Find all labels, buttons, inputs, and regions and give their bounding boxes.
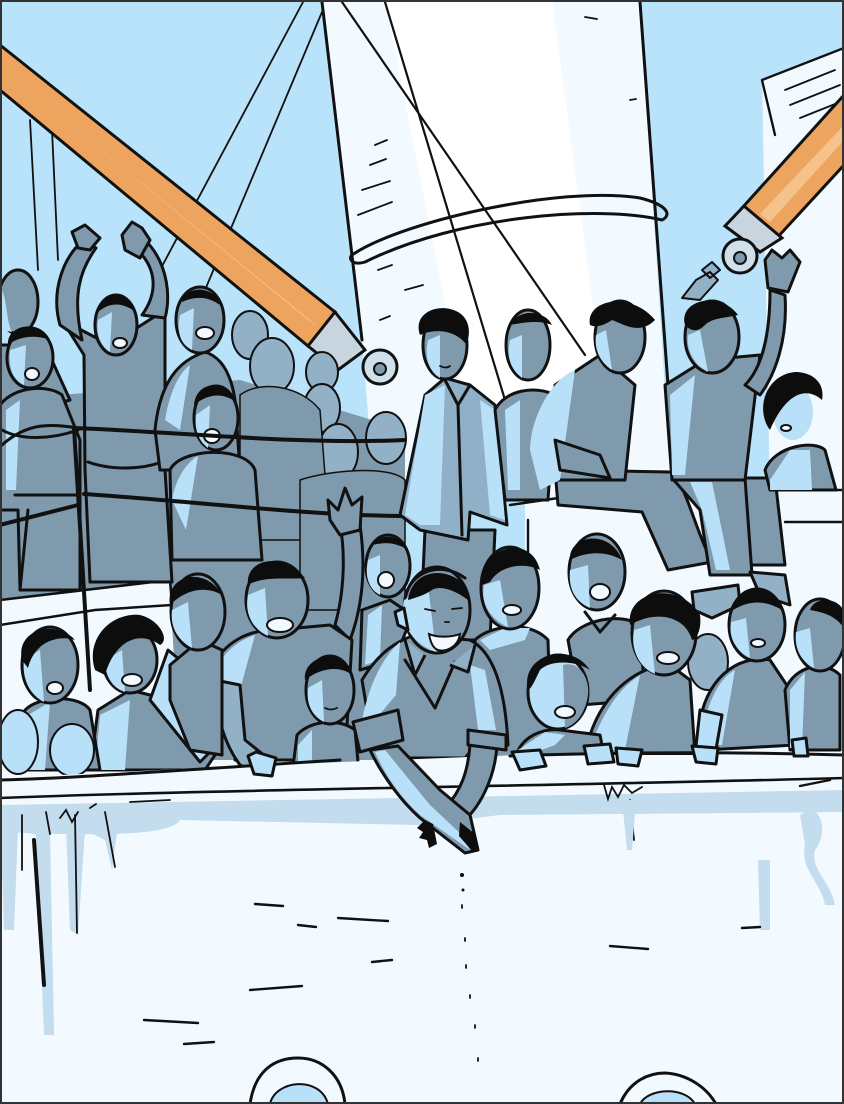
person: seated man with raised arm — [665, 250, 800, 618]
person: standing man in coat — [400, 308, 507, 640]
person: child at the back right — [688, 634, 728, 690]
person: boy in collared shirt — [568, 534, 645, 705]
person: far left behind — [0, 270, 70, 420]
rigging ropes — [30, 2, 585, 400]
person: smiling curly-haired child — [590, 591, 700, 755]
hands gripping the rail — [248, 738, 808, 776]
person: left with black hair — [0, 326, 80, 590]
white deck platform right — [510, 490, 844, 640]
ship mast — [322, 0, 672, 500]
person: cheering with raised arms — [57, 222, 172, 582]
person: smiling at back — [155, 287, 240, 470]
person: man behind woman — [170, 574, 225, 755]
hull brush marks — [144, 780, 830, 1044]
person: seated man in short sleeves — [530, 301, 712, 570]
person: woman with curly hair — [90, 615, 215, 770]
paint drips on hull — [0, 785, 835, 1035]
hull rivets — [460, 873, 478, 1061]
deck railing ropes — [0, 425, 405, 690]
paper sail on the right — [762, 48, 844, 500]
crowd mass background — [0, 380, 405, 760]
person: boy with black hair at rail — [292, 656, 358, 800]
pale deck behind lower crowd — [0, 590, 844, 780]
person: boy at far right edge — [785, 599, 844, 750]
porthole right — [620, 1073, 716, 1104]
white deck platform left — [0, 580, 172, 625]
person: boy with round face at rail — [515, 654, 605, 760]
person: waving man — [210, 488, 363, 776]
person: woman on the right — [763, 372, 836, 490]
orange beam left — [0, 45, 397, 384]
person: front left with dark hair — [0, 627, 100, 776]
person: man at far right rail — [695, 589, 795, 755]
person: small shouting child — [360, 535, 412, 670]
person: central boy's shirt — [362, 635, 508, 758]
orange beam right — [682, 95, 844, 300]
person: behind seated men — [495, 310, 555, 500]
back crowd heads — [232, 311, 406, 610]
person: central laughing boy's head and arms — [353, 567, 506, 853]
ship hull — [0, 753, 844, 1104]
person: middle crowd with open mouth — [170, 385, 262, 560]
person: boy right of centre, dark hair — [475, 547, 552, 760]
porthole left — [250, 1058, 345, 1104]
